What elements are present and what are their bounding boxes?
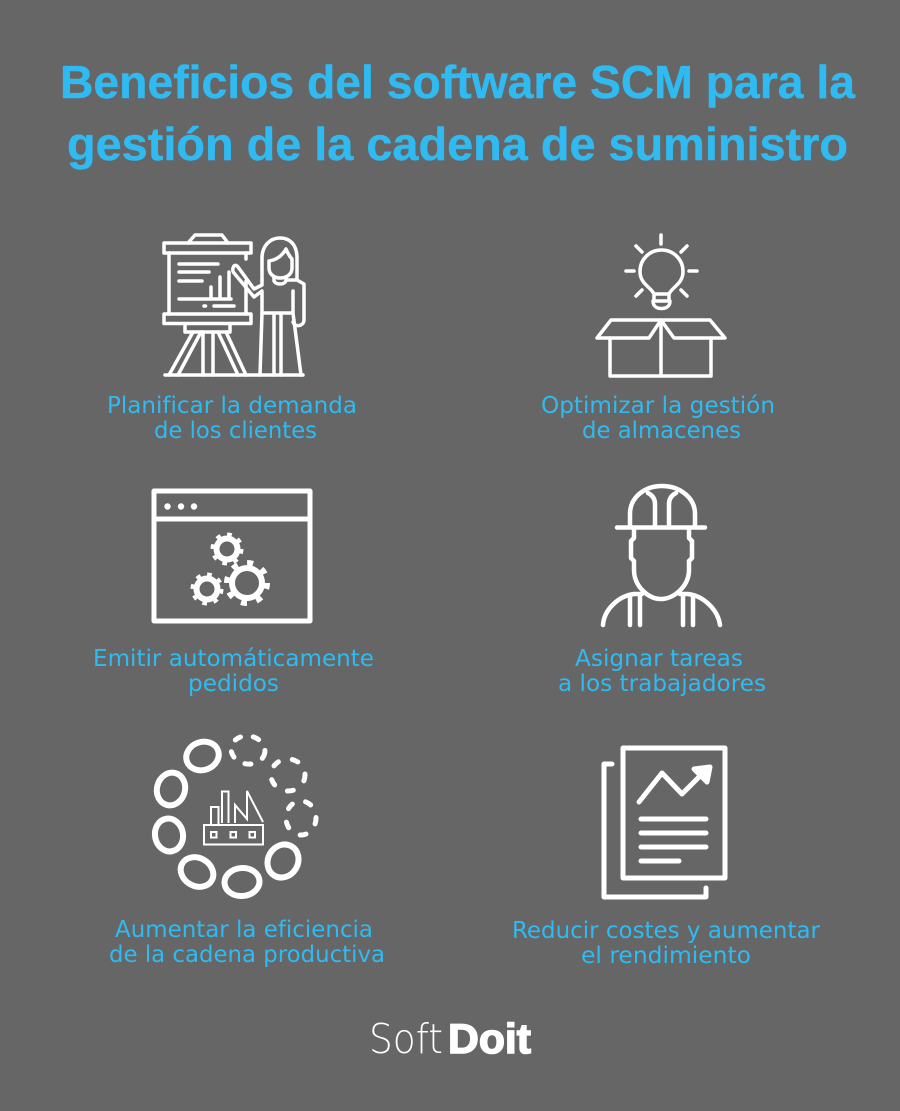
label: reducir: el rendimiento bbox=[581, 941, 751, 969]
label: aumentar: Aumentar la eficiencia bbox=[115, 915, 373, 943]
icon: supply chain around factory bbox=[152, 733, 316, 897]
icon: worker with hard hat bbox=[603, 486, 720, 625]
icon: browser window with gears bbox=[154, 491, 310, 621]
icon: light bulb and box bbox=[597, 235, 725, 376]
logo bbox=[369, 1015, 531, 1063]
label: emitir bbox=[93, 644, 374, 697]
label: optimizar bbox=[541, 391, 775, 444]
label: planificar: Planificar la demanda bbox=[107, 391, 357, 419]
label: aumentar bbox=[109, 915, 385, 968]
label: emitir: Emitir automáticamente bbox=[93, 644, 374, 672]
label: asignar bbox=[558, 644, 766, 697]
label: optimizar: Optimizar la gestión bbox=[541, 391, 775, 419]
icon: report with rising chart bbox=[604, 748, 725, 897]
label: asignar: a los trabajadores bbox=[558, 669, 766, 697]
label: optimizar: de almacenes bbox=[582, 416, 741, 444]
label: reducir: Reducir costes y aumentar bbox=[512, 916, 820, 944]
label: aumentar: de la cadena productiva bbox=[109, 940, 385, 968]
title: gestión de la cadena de suministro bbox=[67, 118, 848, 170]
label: asignar: Asignar tareas bbox=[575, 644, 743, 672]
logo: Soft bbox=[369, 1015, 443, 1063]
label: planificar bbox=[107, 391, 357, 444]
logo: Doit bbox=[448, 1015, 531, 1062]
label: planificar: de los clientes bbox=[154, 416, 317, 444]
title bbox=[60, 56, 855, 170]
label: emitir: pedidos bbox=[188, 669, 279, 697]
icon: presenter at easel bbox=[164, 235, 304, 375]
label: reducir bbox=[512, 916, 820, 969]
title: Beneficios del software SCM para la bbox=[60, 56, 855, 108]
